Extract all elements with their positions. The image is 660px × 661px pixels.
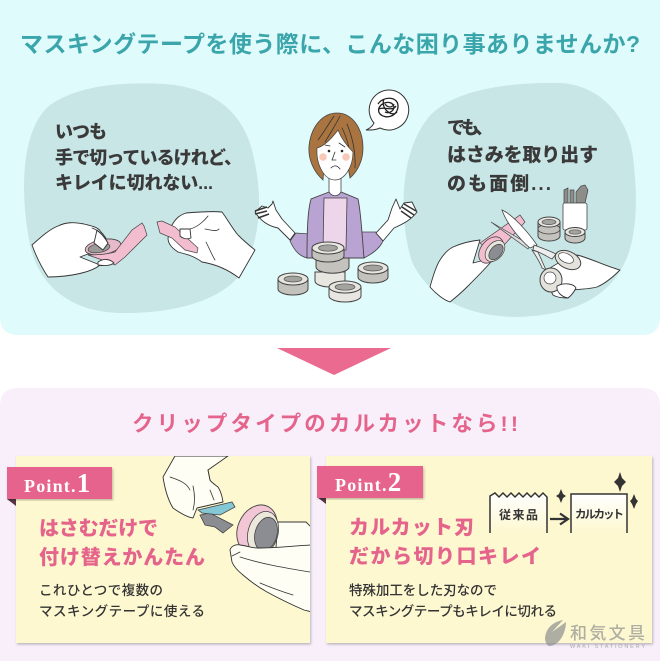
panel: solution [0, 388, 660, 661]
roll: stack middle [316, 258, 349, 273]
text: point 2 description: 特殊加工をした刃なので [349, 583, 497, 598]
card: point 1 [7, 456, 312, 643]
text: right worry: でも、 [447, 118, 493, 138]
text: point 2 description [349, 583, 557, 619]
icon: right hand with torn tape [157, 212, 255, 278]
icon: tape roll stack [278, 242, 388, 302]
logo: Wakibunsho stationery: WAKI STATIONERY [570, 644, 645, 650]
text: point 2 description: マスキングテープもキレイに切れる [349, 603, 557, 619]
text: point 1 description: これひとつで複数の [39, 582, 163, 598]
roll: stack bottom [315, 272, 345, 287]
card: point 2 [317, 456, 652, 650]
heading: point 1: 付け替えかんたん [39, 546, 205, 569]
roll: right [358, 262, 388, 283]
tag: point 1 [7, 467, 112, 506]
panel: scissors hassle [404, 83, 636, 317]
text: left worry: いつも [55, 122, 107, 142]
tag: point 1: Point.1 [24, 468, 91, 498]
arrow: comparison [550, 514, 568, 524]
panel: problems [0, 0, 660, 335]
text: right worry [447, 118, 598, 195]
logo: Wakibunsho stationery: 和気文具 [570, 624, 645, 643]
illustration: attaching the clip [163, 456, 312, 612]
roll: front [329, 281, 361, 302]
blob: right background [404, 83, 636, 317]
karukatto blade edge [571, 494, 627, 533]
blob: left background [24, 83, 259, 313]
card background [326, 456, 652, 643]
roll: left [278, 273, 308, 295]
tag: point 2 [317, 466, 423, 504]
heading: point 1 [39, 517, 205, 569]
conventional blade edge: 従来品 [499, 507, 538, 522]
icon: pen cup and tape rolls [538, 185, 588, 243]
text: left worry [55, 122, 242, 193]
roll: stack top [312, 242, 344, 262]
heading: point 2 [349, 517, 541, 568]
illustration: worried woman with tape rolls [255, 90, 417, 302]
icon: left arm and hand [255, 201, 309, 258]
conventional blade edge [490, 493, 547, 533]
icon: right arm and hand [360, 199, 417, 258]
card background [16, 456, 310, 643]
text: right worry: のも面倒... [447, 172, 551, 195]
icon: left hand with tape [32, 223, 147, 277]
icon: neck and cardigan [307, 178, 364, 258]
title: マスキングテープを使う際に、こんな困り事ありませんか? [20, 31, 640, 57]
tag: point 2: Point.2 [335, 467, 402, 497]
icon: sparkles [556, 472, 638, 509]
text: point 1 description: マスキングテープに使える [39, 603, 205, 619]
heading: point 2: カルカット刃 [349, 517, 474, 539]
icon: head and hair [309, 113, 363, 180]
karukatto blade edge: カルカット [575, 508, 624, 521]
icon: hand with pink tape [430, 215, 525, 302]
panel: tearing by hand [24, 83, 259, 313]
icon: thought bubble [366, 90, 409, 130]
text: left worry: 手で切っているけれど、 [55, 147, 242, 168]
icon: scissors and hand [491, 210, 620, 298]
diagram: cut comparison [490, 472, 638, 533]
heading: point 2: だから切り口キレイ [349, 545, 541, 568]
heading: point 1: はさむだけで [39, 517, 158, 540]
heading: solution: クリップタイプのカルカットなら!! [132, 412, 518, 436]
text: left worry: キレイに切れない... [55, 173, 213, 193]
arrow: down [277, 348, 391, 375]
text: point 1 description [39, 582, 205, 619]
text: right worry: はさみを取り出す [447, 144, 598, 166]
logo: Wakibunsho stationery [545, 620, 645, 650]
